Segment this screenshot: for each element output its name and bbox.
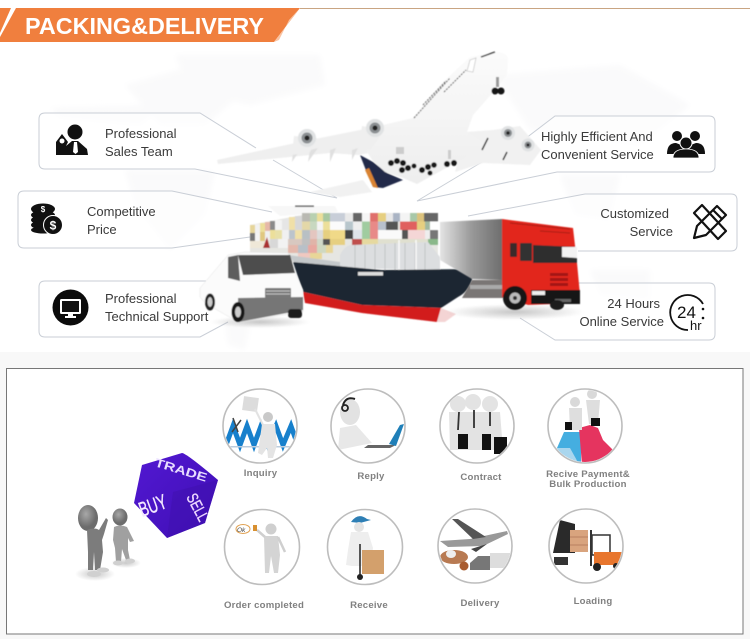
text: competitive price: Price xyxy=(87,222,117,237)
step: inquiry xyxy=(223,389,297,479)
text: professional technical support: Professional xyxy=(105,291,177,306)
text: highly efficient: Highly Efficient And xyxy=(541,129,653,144)
callout: professional sales team xyxy=(39,113,337,198)
callout: competitive price xyxy=(18,191,272,248)
hull xyxy=(293,262,472,308)
illustration: trade dice: BUY xyxy=(136,490,170,521)
text: professional sales team: Professional xyxy=(105,126,177,141)
text: customized service: Service xyxy=(630,224,673,239)
stabilizer xyxy=(310,180,372,197)
step: order completed: Ok xyxy=(237,527,246,534)
ship deck xyxy=(268,206,338,216)
engines xyxy=(292,119,534,155)
illustration: trade dice: TRADE xyxy=(153,455,209,485)
step: reply xyxy=(331,389,405,482)
callout: 24 hours online service xyxy=(520,283,715,340)
text: highly efficient: Convenient Service xyxy=(541,147,654,162)
icon: coins: $ xyxy=(41,205,46,214)
panel: trade process xyxy=(6,368,743,634)
title: PACKING&DELIVERY xyxy=(25,13,264,39)
illustration: truck xyxy=(440,219,585,320)
callout: technical support xyxy=(39,281,228,337)
illustration: van xyxy=(200,252,310,328)
label: Receive xyxy=(350,600,388,611)
step: receive xyxy=(328,510,402,611)
fuselage xyxy=(360,52,508,184)
illustration: airplane xyxy=(217,52,541,197)
superstructure xyxy=(340,242,440,270)
illustration: trade dice: SELL xyxy=(183,490,213,524)
step: payment and production xyxy=(546,389,630,490)
icon: coins: $ xyxy=(50,218,57,232)
label: Recive Payment& xyxy=(546,469,630,480)
icon: 24hr clock: 24 xyxy=(677,303,696,322)
step: order completed xyxy=(224,510,304,611)
icon: 24hr clock: hr xyxy=(690,318,702,333)
tail xyxy=(360,155,403,188)
step: loading xyxy=(549,509,623,607)
label: Order completed xyxy=(224,600,304,611)
text: customized service: Customized xyxy=(600,206,669,221)
callout: highly efficient service xyxy=(417,116,715,201)
icon: pencil and ruler xyxy=(694,205,726,239)
label: Inquiry xyxy=(244,468,278,479)
step: contract xyxy=(440,389,514,483)
label: Loading xyxy=(574,596,612,607)
icon: salesperson xyxy=(56,124,88,155)
illustration: trade dice xyxy=(134,453,218,538)
header banner xyxy=(0,8,750,42)
text: professional technical support: Technical Support xyxy=(105,309,209,324)
trailer xyxy=(440,219,502,280)
label: Delivery xyxy=(460,598,500,609)
text: professional sales team: Sales Team xyxy=(105,144,173,159)
icon: monitor xyxy=(52,290,88,326)
text: 24 hours: Online Service xyxy=(579,314,664,329)
text: 24 hours: 24 Hours xyxy=(607,296,660,311)
illustration: two figures xyxy=(75,505,141,581)
label line 2: Bulk Production xyxy=(549,479,627,490)
right wing xyxy=(455,126,541,172)
illustration: container ship xyxy=(250,206,472,322)
icon: team xyxy=(667,131,705,158)
text: competitive price: Competitive xyxy=(87,204,156,219)
flap tracks xyxy=(292,148,358,162)
landing gear xyxy=(388,77,504,176)
callout: customized service xyxy=(468,194,737,251)
step: delivery xyxy=(438,509,512,609)
left wing xyxy=(217,126,385,164)
icon: coins xyxy=(31,204,62,234)
label: Contract xyxy=(460,472,502,483)
icon: 24hr clock xyxy=(670,295,704,333)
containers xyxy=(250,213,438,262)
truck shadow xyxy=(445,304,585,320)
world map backdrop xyxy=(50,55,690,350)
cab xyxy=(502,219,580,305)
label: Reply xyxy=(357,471,385,482)
